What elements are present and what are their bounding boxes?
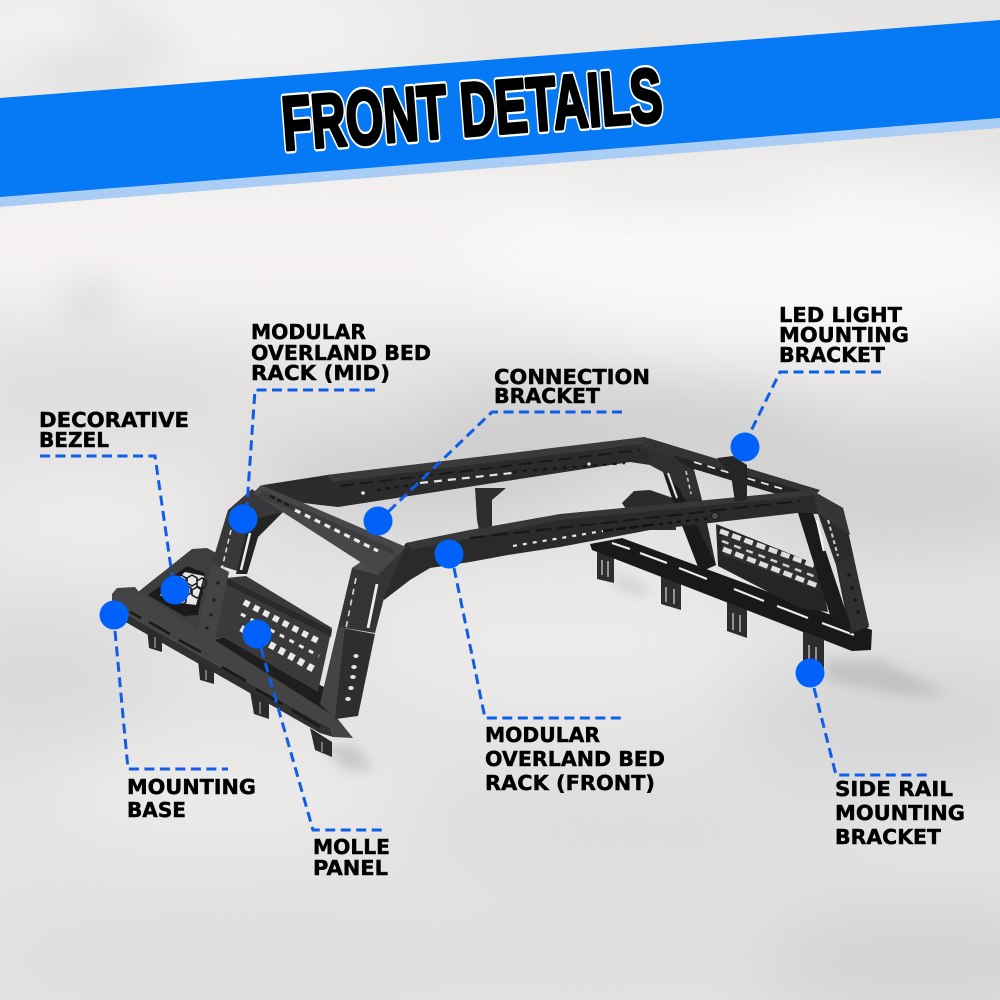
molle panel (212, 576, 332, 692)
title banner (0, 20, 1000, 207)
label: molle panel: PANEL (313, 856, 388, 880)
truck bed rack illustration (112, 437, 950, 770)
dashed leader lines (40, 372, 931, 830)
label: modular overland bed rack (front): RACK (FRONT) (485, 771, 655, 795)
label: connection bracket (494, 365, 650, 408)
label: side rail mounting bracket: BRACKET (835, 825, 941, 849)
rear hex panel (622, 490, 676, 530)
banner blue band (0, 20, 1000, 197)
front crossbar (253, 485, 406, 574)
label: modular overland bed rack (mid): MODULAR (251, 320, 366, 344)
label: modular overland bed rack (mid) (251, 320, 431, 385)
label: modular overland bed rack (mid): RACK (MID) (251, 361, 390, 385)
front feet (147, 628, 332, 757)
label: modular overland bed rack (front): MODULAR (485, 723, 600, 747)
rear molle panel (716, 524, 828, 612)
rail slots (612, 543, 854, 635)
label: LED light mounting bracket: BRACKET (779, 343, 885, 367)
banner light shadow band (0, 117, 1000, 207)
front assembly (112, 485, 406, 757)
label: molle panel: MOLLE (313, 835, 390, 859)
callout dots (100, 432, 824, 688)
bezel panel (133, 548, 222, 640)
title: FRONT DETAILS: FRONT DETAILS (279, 53, 665, 167)
molle panel tray (213, 637, 335, 720)
right upright leg (338, 548, 405, 633)
label: side rail mounting bracket: MOUNTING (835, 801, 965, 825)
label: mounting base (127, 775, 256, 822)
label: LED light mounting bracket: MOUNTING (779, 323, 909, 347)
label: side rail mounting bracket (835, 777, 965, 849)
left bracket (197, 563, 229, 645)
rear feet (597, 549, 824, 668)
label: LED light mounting bracket (779, 303, 909, 367)
left upright leg (212, 489, 283, 574)
label: modular overland bed rack (front) (485, 723, 665, 795)
title: FRONT DETAILS: FRONT DETAILS (279, 53, 665, 167)
title: FRONT DETAILS (279, 53, 665, 167)
label: connection bracket: CONNECTION (494, 365, 650, 389)
label: decorative bezel: BEZEL (39, 428, 109, 452)
label: mounting base: MOUNTING (127, 775, 256, 799)
right leg brackets (320, 627, 375, 719)
label: modular overland bed rack (front): OVERLAND BED (485, 747, 665, 771)
label: side rail mounting bracket: SIDE RAIL (835, 777, 953, 801)
label: decorative bezel: DECORATIVE (39, 408, 189, 432)
label: modular overland bed rack (mid): OVERLAND BED (251, 341, 431, 365)
rack connection post (717, 456, 747, 502)
front long rail (376, 456, 869, 634)
label: molle panel (313, 835, 390, 880)
back top rail (255, 437, 820, 572)
rear cross bar (640, 438, 820, 497)
front base rail (112, 587, 353, 738)
label: decorative bezel (39, 408, 189, 452)
ground shadows (320, 575, 950, 770)
rear right leg (798, 513, 852, 630)
label: connection bracket: BRACKET (494, 384, 600, 408)
rear rail (590, 538, 872, 651)
label: LED light mounting bracket: LED LIGHT (779, 303, 902, 327)
mid vertical bracket (475, 488, 506, 535)
rear side rail with feet (590, 538, 872, 668)
label: mounting base: BASE (127, 798, 186, 822)
